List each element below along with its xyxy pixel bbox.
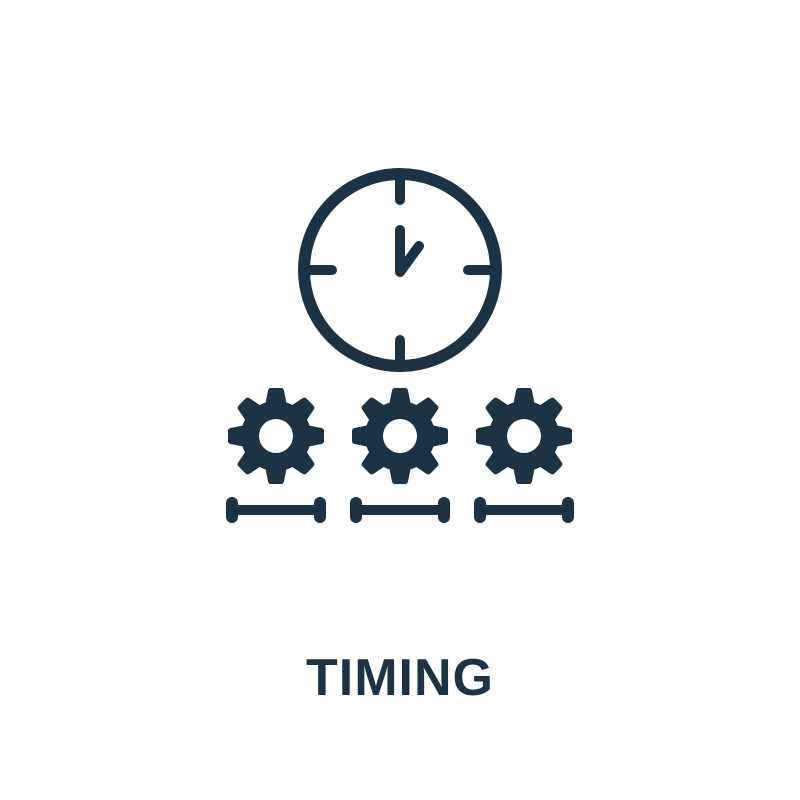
icon: gears	[231, 391, 569, 481]
icon: clock	[304, 174, 496, 366]
title: TIMING	[306, 649, 494, 707]
icon: timeline bars	[232, 503, 568, 517]
